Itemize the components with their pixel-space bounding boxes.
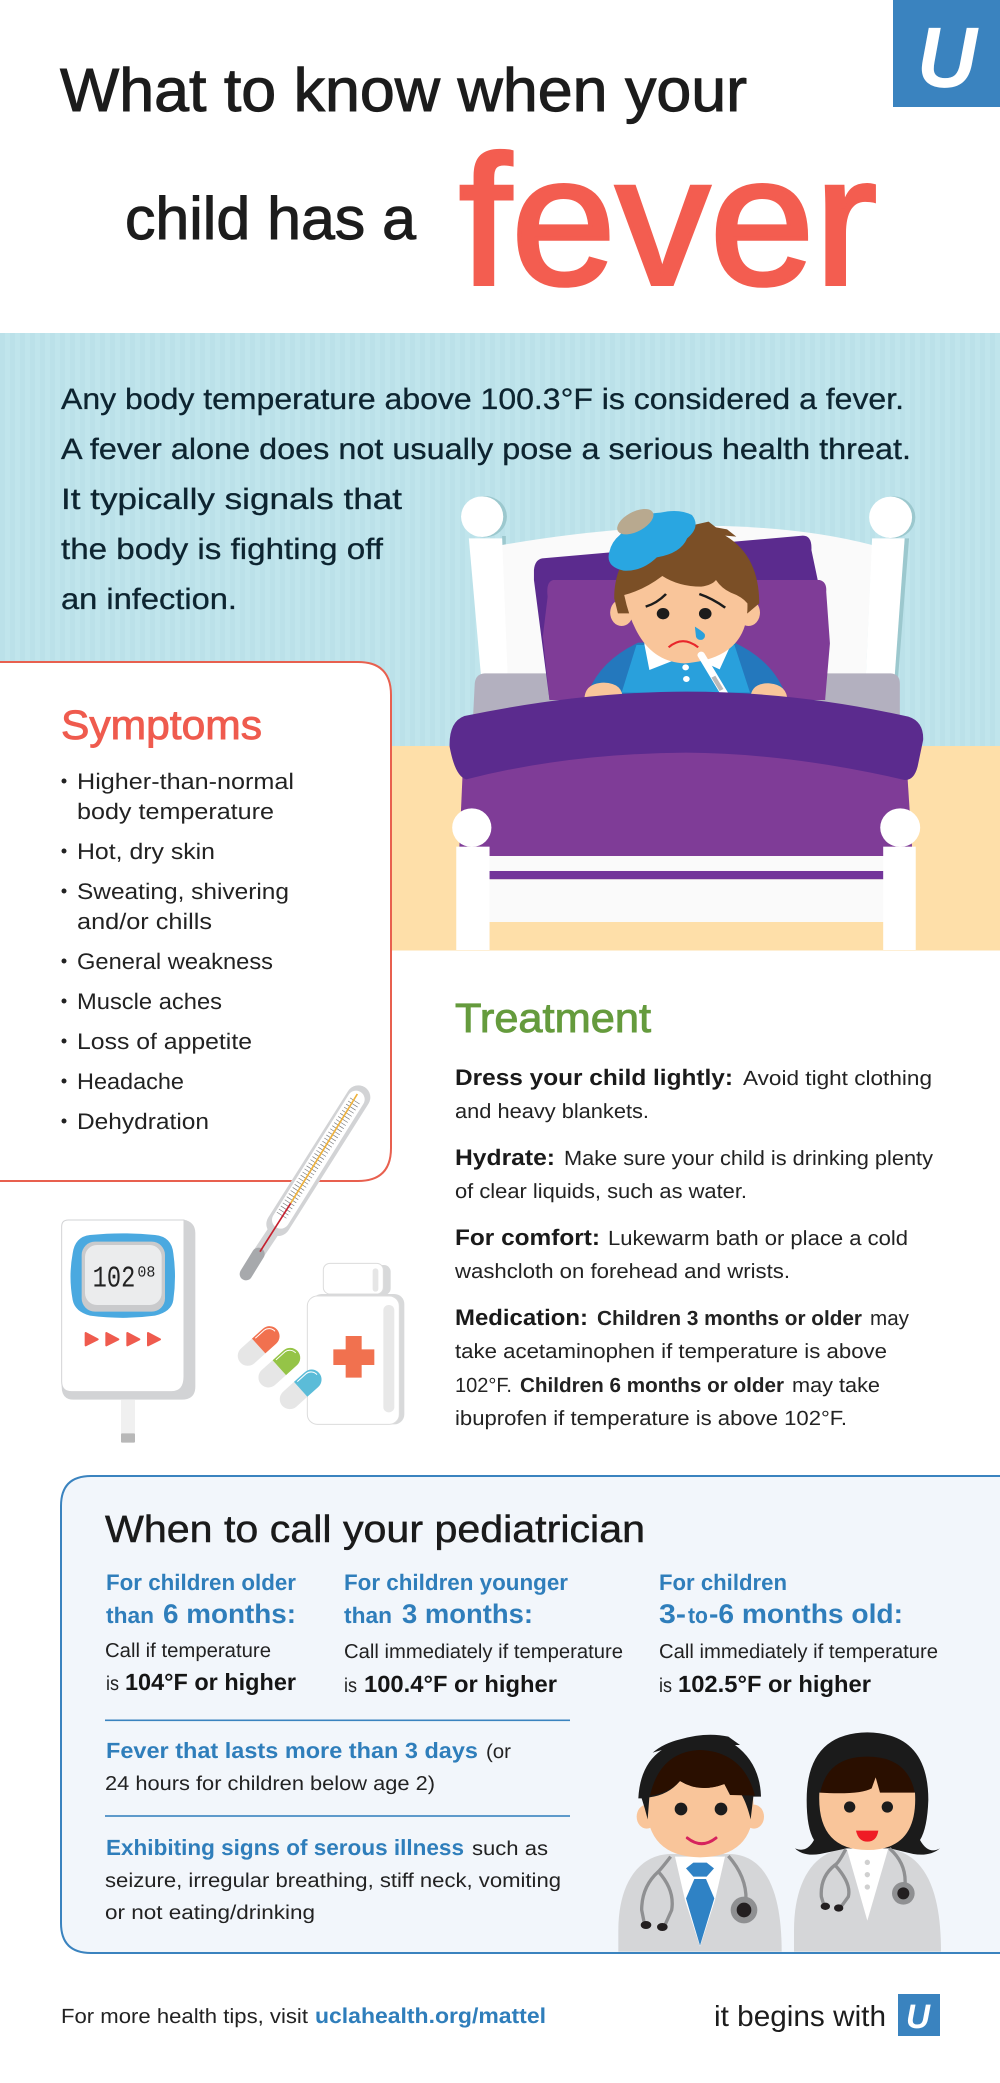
intro text: It typically signals that [61,483,402,516]
title: child has a [125,185,417,252]
background: floor [0,746,1000,950]
treatment: dress lightly: Avoid tight clothing [743,1067,932,1090]
treatment heading: Treatment [455,995,652,1041]
symptoms list: Hot, dry skin [77,839,215,864]
footer: it begins with U: U [906,1998,931,2036]
intro text [61,383,911,616]
column: older than 6 months: 6 months: [163,1599,296,1629]
treatment: medication [455,1305,910,1430]
column: 3-to-6 months: For children [659,1570,787,1595]
symptoms heading: Symptoms [61,702,262,748]
treatment: hydrate: Make sure your child is drinking plenty [564,1147,934,1170]
note: fever duration [105,1738,511,1795]
panel: when to call your pediatrician [61,1476,1000,1953]
treatment: medication: Medication: [455,1305,588,1330]
treatment: medication: Children 6 months or older [520,1374,784,1397]
column: younger than 3 months: For children younger [344,1570,568,1595]
column: 3-to-6 months: Call immediately if temperature [659,1641,938,1663]
pillows [534,536,830,700]
brows [646,594,725,608]
title [60,56,877,323]
icon: medicine bottle and pills [234,1263,404,1424]
treatment: medication: may take [792,1374,880,1397]
note: signs of illness: seizure, irregular breathing, stiff neck, vomiting [105,1870,561,1892]
title: fever [459,117,877,323]
column: younger than 3 months [344,1570,623,1697]
symptoms list: Headache [77,1069,184,1094]
ears [610,599,633,626]
footer: it begins with U [714,1994,940,2036]
note: fever duration: 24 hours for children below age 2) [105,1773,435,1795]
column: younger than 3 months: Call immediately if temperature [344,1641,623,1663]
collar [644,643,730,670]
column: older than 6 months: For children older [106,1570,296,1595]
illustration: male doctor [618,1735,782,1952]
eyes [657,608,669,619]
symptoms list: and/or chills [77,909,212,934]
column: 3-to-6 months: -6 months old: [709,1599,903,1629]
tear [695,627,705,640]
column: 3-to-6 months: 102.5°F or higher [678,1671,871,1697]
intro text: Any body temperature above 100.3°F is considered a fever. [61,383,904,416]
column: older than 6 months: is [106,1673,119,1695]
treatment: comfort: washcloth on forehead and wrists. [454,1260,790,1283]
logo: U badge: U [917,10,979,106]
treatment: dress lightly: Dress your child lightly: [455,1065,733,1090]
treatment: medication: take acetaminophen if temperature is above [455,1340,887,1363]
symptoms list: Loss of appetite [77,1029,252,1054]
note: fever duration: Fever that lasts more than 3 days [106,1738,478,1763]
treatment: hydrate [455,1145,934,1203]
panel: symptoms [0,662,391,1181]
buttons [682,664,689,670]
hands [584,683,623,702]
column: older than 6 months: 104°F or higher [125,1669,296,1695]
shirt [588,643,784,700]
hair [614,522,759,613]
column: 3-to-6 months: is [659,1675,672,1697]
icon: digital meter: 08 [137,1264,155,1281]
intro text: A fever alone does not usually pose a serious health threat. [61,433,911,466]
panel: treatment [454,995,934,1430]
note: signs of illness: or not eating/drinking [105,1902,315,1924]
note: fever duration: (or [486,1741,511,1763]
treatment: dress lightly [455,1065,932,1123]
intro text: the body is fighting off [61,533,384,566]
column: younger than 3 months: 100.4°F or higher [364,1671,557,1697]
bed headboard [461,496,915,678]
icon: digital meter: 102 [93,1262,135,1296]
symptoms list: Sweating, shivering [77,879,289,904]
symptoms list: General weakness [77,949,273,974]
column: older than 6 months [105,1570,296,1695]
column: 3-to-6 months [659,1570,938,1697]
symptoms list: Higher-than-normal [77,769,294,794]
treatment: comfort: Lukewarm bath or place a cold [608,1227,908,1250]
blanket [450,692,923,858]
mouth [669,641,698,647]
treatment: hydrate: Hydrate: [455,1145,555,1170]
column: 3-to-6 months: to [688,1603,708,1628]
ice pack [609,511,696,571]
treatment: comfort: For comfort: [455,1225,600,1250]
title: What to know when your [60,56,747,124]
treatment: dress lightly: and heavy blankets. [455,1100,649,1123]
treatment: comfort [454,1225,908,1283]
treatment: medication: 102°F. [455,1374,512,1397]
note: signs of illness [105,1835,561,1924]
footer: health tips link [61,2004,546,2028]
intro text: an infection. [61,583,237,616]
face [624,576,747,663]
boy [584,504,787,702]
symptoms list [62,769,294,1134]
illustration: female doctor [794,1732,941,1952]
background: striped wall [0,333,1000,747]
footer: it begins with U: it begins with [714,2001,886,2033]
column: younger than 3 months: than [344,1603,392,1628]
icon: thermometer [246,1094,358,1274]
illustration: sick boy in bed [450,496,923,950]
treatment: medication: ibuprofen if temperature is above 102°F. [455,1407,847,1430]
treatment: hydrate: of clear liquids, such as water. [455,1180,747,1203]
mattress [473,673,900,720]
symptoms list: Muscle aches [77,989,222,1014]
treatment: medication: may [870,1307,910,1330]
symptoms list: body temperature [77,799,274,824]
treatment: medication: Children 3 months or older [597,1307,862,1330]
column: older than 6 months: than [106,1603,154,1628]
column: 3-to-6 months: 3- [659,1599,686,1629]
column: younger than 3 months: is [344,1675,357,1697]
oral thermometer [701,655,728,699]
footer: health tips link: For more health tips, visit [61,2005,308,2028]
bed footboard [452,808,920,950]
column: younger than 3 months: 3 months: [402,1599,533,1629]
column: older than 6 months: Call if temperature [105,1640,271,1662]
note: signs of illness: Exhibiting signs of serous illness [106,1835,464,1860]
call heading: When to call your pediatrician [105,1509,645,1551]
symptoms list: Dehydration [77,1109,209,1134]
logo: U badge [893,0,1000,107]
note: signs of illness: such as [472,1838,548,1860]
icon: digital meter [62,1220,195,1443]
footer: health tips link: uclahealth.org/mattel [315,2004,546,2028]
